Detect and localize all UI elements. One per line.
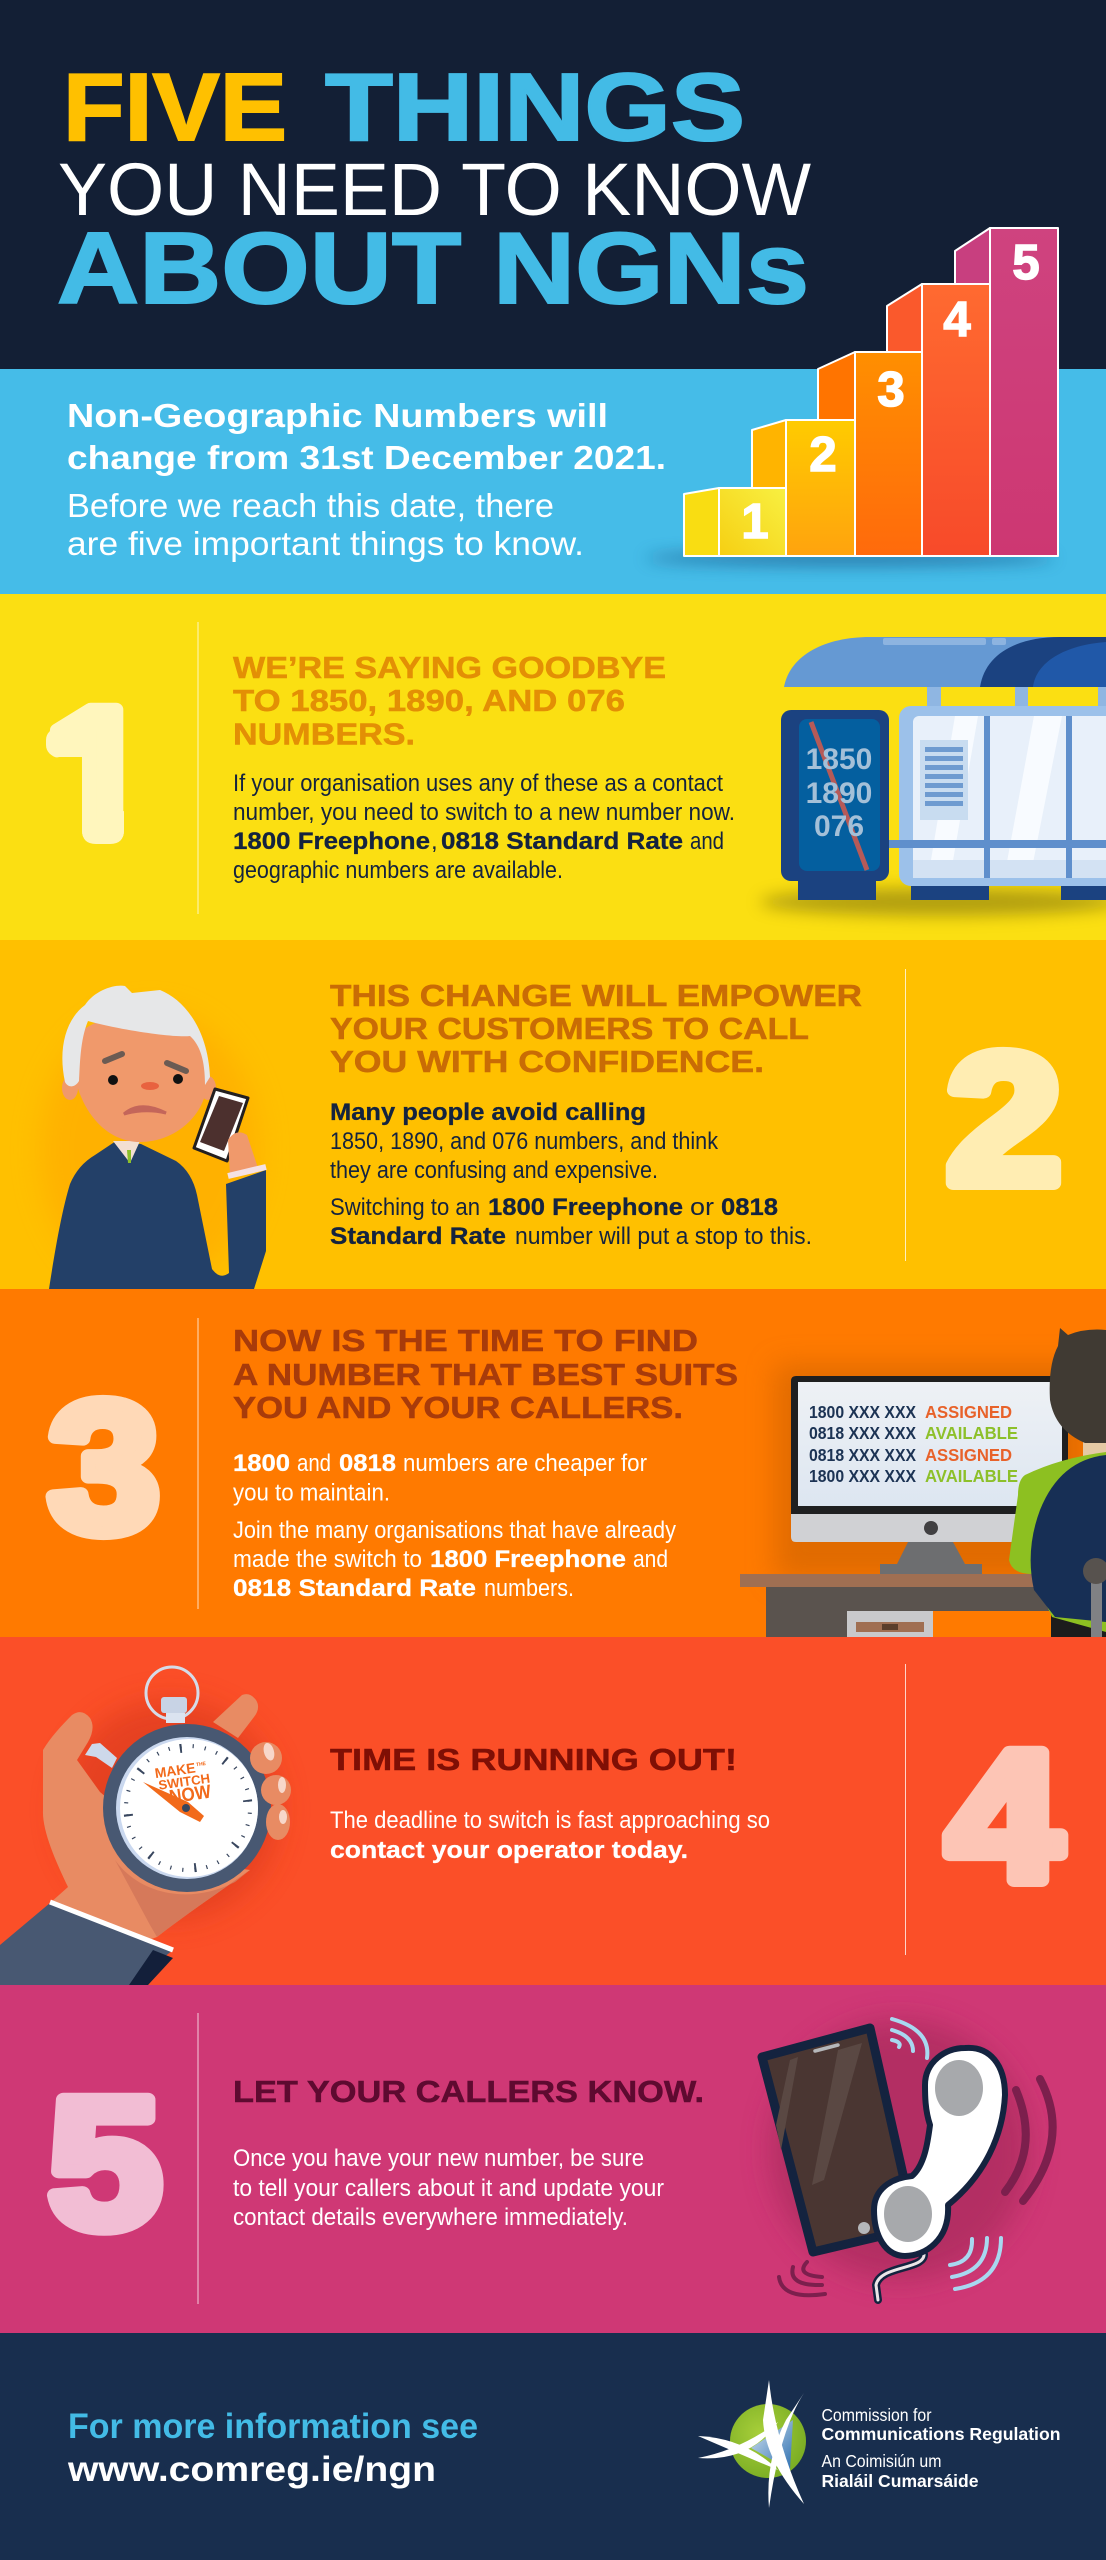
logo: ComReg star (698, 2380, 806, 2508)
dial wording: make the switch now: NOW (168, 1782, 212, 1808)
illustration: person at computer monitor (740, 1328, 1106, 1637)
big number 1 (46, 702, 124, 844)
text block 2: 1800 Freephone (488, 1194, 683, 1221)
text block 5: Once you have your new number, be sure (233, 2145, 644, 2172)
text block 3: numbers. (484, 1575, 574, 1602)
text block 3: and (297, 1450, 331, 1477)
intro text (67, 397, 666, 562)
title: YOU NEED TO KNOW (58, 148, 811, 231)
logo wording: Communications Regulation (822, 2424, 1060, 2444)
text block 5: to tell your callers about it and update your (233, 2175, 664, 2202)
panel: point 5 (0, 1985, 1106, 2333)
heading 1 (233, 650, 666, 752)
call to action: For more information see (68, 2407, 478, 2446)
intro text: Before we reach this date, there (67, 487, 554, 524)
screen: number list: ASSIGNED (925, 1445, 1012, 1465)
illustration: smartphone and ringing handset (762, 2019, 1053, 2300)
logo wording: Rialáil Cumarsáide (822, 2471, 979, 2491)
intro text: change from 31st December 2021. (67, 439, 666, 476)
panel: point 3 (0, 1289, 1106, 1637)
heading 1: TO 1850, 1890, AND 076 (233, 683, 625, 718)
heading 2: YOU WITH CONFIDENCE. (330, 1044, 764, 1079)
text block 3: 0818 Standard Rate (233, 1575, 476, 1602)
text block 2: or (690, 1194, 714, 1221)
call to action (67, 2407, 478, 2489)
screen: number list: 1800 XXX XXX (809, 1402, 916, 1422)
text block 1: If your organisation uses any of these as a contact (233, 770, 723, 797)
text block 3: and (633, 1546, 668, 1573)
heading 2: YOUR CUSTOMERS TO CALL (330, 1011, 809, 1046)
text block 3: 1800 Freephone (430, 1546, 626, 1573)
text block 1: , (431, 828, 438, 855)
screen: number list: AVAILABLE (925, 1423, 1018, 1443)
text block 2: 1850, 1890, and 076 numbers, and think (330, 1128, 719, 1155)
panel: point 4 (0, 1637, 1106, 1985)
text block 2: they are confusing and expensive. (330, 1157, 658, 1184)
big number 2: 2 (946, 1015, 1062, 1223)
text block 2: Standard Rate (330, 1223, 506, 1250)
illustration: bus shelter with crossed-out numbers (760, 637, 1106, 916)
text block 4: The deadline to switch is fast approaching so (330, 1807, 770, 1834)
heading 1: WE’RE SAYING GOODBYE (233, 650, 666, 685)
text block 1: geographic numbers are available. (233, 857, 563, 884)
heading 3: NOW IS THE TIME TO FIND (233, 1323, 698, 1358)
text block 1: 1800 Freephone (233, 828, 430, 855)
text block 5 (233, 2145, 664, 2231)
text block 1: number, you need to switch to a new number now. (233, 799, 735, 826)
big number 1: 1 (44, 670, 152, 877)
screen: number list: 0818 XXX XXX (809, 1423, 916, 1443)
text block 1 (233, 770, 735, 884)
text block 1: 0818 Standard Rate (441, 828, 683, 855)
chart: rising staircase 1 to 5: 4 (943, 293, 971, 347)
illustration: worried man on phone (40, 986, 266, 1290)
text block 4: contact your operator today. (330, 1837, 688, 1864)
text block 3: you to maintain. (233, 1480, 390, 1506)
screen: number list (809, 1402, 1018, 1486)
big number 3: 3 (48, 1364, 160, 1570)
text block 1: and (690, 828, 724, 855)
text block 3: 1800 (233, 1450, 290, 1477)
text block 3 (233, 1450, 676, 1602)
screen: number list: ASSIGNED (925, 1402, 1012, 1422)
heading 4: TIME IS RUNNING OUT! (330, 1742, 737, 1777)
panel: introduction (0, 369, 1106, 594)
dial wording: make the switch now: SWITCH (157, 1771, 211, 1793)
title (57, 54, 811, 325)
text block 2 (330, 1099, 812, 1250)
screen: number list: AVAILABLE (925, 1466, 1018, 1486)
heading 5: LET YOUR CALLERS KNOW. (233, 2074, 704, 2109)
text block 2: 0818 (721, 1194, 778, 1221)
title: ABOUT NGNs (57, 213, 809, 325)
chart: rising staircase 1 to 5: 5 (1012, 236, 1040, 290)
heading 1: NUMBERS. (233, 716, 415, 752)
chart: rising staircase 1 to 5: 3 (877, 363, 905, 417)
intro text: are five important things to know. (67, 525, 584, 562)
text block 4 (330, 1807, 770, 1864)
dial wording: make the switch now: THE (196, 1761, 207, 1768)
text block 3: numbers are cheaper for (403, 1450, 647, 1477)
logo wording (822, 2405, 1060, 2491)
screen: number list: 1800 XXX XXX (809, 1466, 916, 1486)
text block 3: made the switch to (233, 1546, 422, 1573)
heading 2: THIS CHANGE WILL EMPOWER (330, 978, 862, 1013)
screen: number list: 0818 XXX XXX (809, 1445, 916, 1465)
heading 2 (330, 978, 862, 1079)
text block 3: 0818 (339, 1450, 396, 1477)
panel: footer (0, 2333, 1106, 2560)
chart: rising staircase 1 to 5: 1 (741, 495, 769, 549)
panel: point 1 (0, 594, 1106, 940)
big number 4: 4 (946, 1712, 1062, 1920)
text block 3: Join the many organisations that have already (233, 1517, 676, 1544)
chart: rising staircase 1 to 5 (645, 228, 1058, 566)
text block 2: number will put a stop to this. (515, 1223, 812, 1250)
call to action: www.comreg.ie/ngn (67, 2450, 436, 2489)
illustration: bus shelter with crossed-out numbers: 1850 (806, 743, 872, 776)
logo wording: An Coimisiún um (822, 2451, 942, 2471)
panel: point 2 (0, 940, 1106, 1290)
panel: title header (0, 0, 1106, 370)
text block 5: contact details everywhere immediately. (233, 2204, 628, 2231)
title: THINGS (325, 54, 745, 161)
text block 2: Switching to an (330, 1194, 480, 1221)
heading 3 (233, 1323, 738, 1425)
illustration: bus shelter with crossed-out numbers: 1890 (806, 777, 872, 810)
dial wording: make the switch now (154, 1758, 213, 1810)
heading 3: YOU AND YOUR CALLERS. (233, 1390, 683, 1425)
intro text: Non-Geographic Numbers will (67, 397, 608, 434)
logo wording: Commission for (822, 2405, 932, 2425)
illustration: bus shelter with crossed-out numbers: 076 (814, 810, 864, 843)
big number 5: 5 (48, 2061, 162, 2267)
heading 3: A NUMBER THAT BEST SUITS (233, 1357, 738, 1392)
chart: rising staircase 1 to 5: 2 (809, 428, 837, 482)
text block 2: Many people avoid calling (330, 1099, 646, 1126)
illustration: hand holding stopwatch (0, 1667, 291, 1985)
dial wording: make the switch now: MAKE (154, 1760, 196, 1781)
title: FIVE (63, 54, 287, 161)
